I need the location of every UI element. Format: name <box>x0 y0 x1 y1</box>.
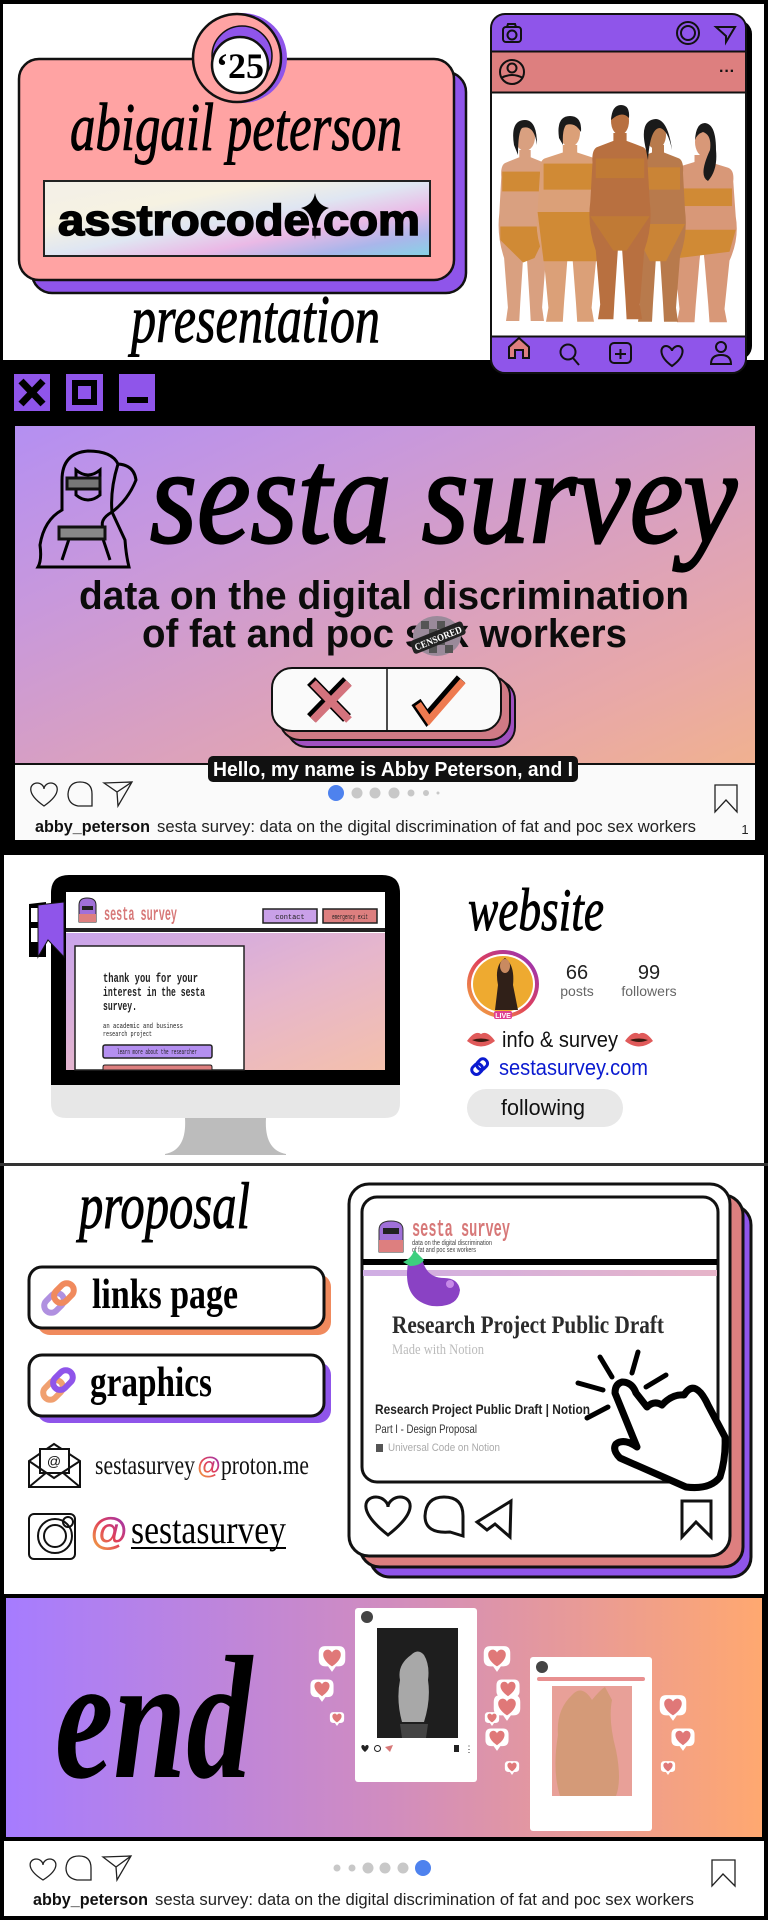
instagram row: @ <box>90 1511 128 1553</box>
heading: website: website <box>468 877 604 943</box>
email row: @ <box>47 1453 61 1469</box>
stat: followers: 99 <box>638 962 660 984</box>
pagination dots <box>334 1860 431 1876</box>
pagination dots <box>328 785 440 801</box>
site header logo <box>79 898 96 922</box>
icon: profile badge and send <box>677 22 735 44</box>
panel: post footer 1 <box>15 756 755 840</box>
notion sub title: of fat and poc sex workers <box>412 1247 476 1254</box>
post caption: sesta survey: data on the digital discrimination of fat and poc sex workers <box>155 1890 694 1909</box>
icon: home <box>509 338 529 358</box>
stat: followers: followers <box>621 983 677 999</box>
profile avatar: LIVE <box>495 1013 511 1020</box>
icon: user <box>500 60 524 84</box>
badge: '25 <box>193 13 287 103</box>
panel: website section <box>0 855 768 1166</box>
bottom nav icons <box>560 342 731 366</box>
icon: cross <box>311 681 349 720</box>
emergency exit button <box>323 909 377 923</box>
link preview: Part I - Design Proposal <box>375 1422 477 1436</box>
post action icons <box>30 1856 735 1886</box>
site content card: survey. <box>103 999 137 1014</box>
notion sub title: data on the digital discrimination <box>412 1240 492 1247</box>
post card with dark photo: ⋮ <box>464 1744 474 1754</box>
heading: proposal: proposal <box>76 1170 250 1243</box>
censored stamp: CENSORED <box>413 625 464 653</box>
phone mockup <box>491 14 752 373</box>
post caption: abby_peterson <box>33 1890 148 1909</box>
site content card: an academic and business <box>103 1023 183 1031</box>
panel: sesta survey slide <box>15 422 755 763</box>
stat: posts <box>560 962 594 999</box>
notion post card <box>349 1184 751 1577</box>
emergency exit button: emergency exit <box>332 914 368 922</box>
bookmark ribbon <box>29 902 64 957</box>
panel: title section background <box>3 4 764 360</box>
instagram row: sestasurvey <box>131 1507 286 1552</box>
post card with dark photo <box>355 1608 477 1782</box>
email row: proton.me <box>221 1450 309 1480</box>
link preview: Universal Code on Notion <box>388 1442 500 1454</box>
monitor <box>29 875 400 1155</box>
contact button: contact <box>275 914 305 922</box>
icon: chain link purple <box>40 1367 76 1403</box>
window buttons <box>14 374 155 411</box>
notion page heading: Research Project Public Draft <box>392 1312 665 1339</box>
post caption: sesta survey: data on the digital discrimination of fat and poc sex workers <box>157 817 696 836</box>
link preview <box>375 1401 590 1454</box>
email row <box>29 1444 309 1487</box>
badge: '25: ‘25 <box>216 46 264 86</box>
presentation label: presentation <box>128 281 380 357</box>
stat: followers <box>621 962 677 999</box>
button: graphics: graphics <box>90 1360 212 1406</box>
panel: proposal section <box>4 1166 764 1594</box>
stat: posts: posts <box>560 983 594 999</box>
notion byline: Made with Notion <box>392 1342 484 1358</box>
post caption: abby_peterson <box>35 817 150 836</box>
site content card: learn more about the researcher <box>117 1049 197 1057</box>
notion logo <box>379 1221 403 1252</box>
post card with pink photo <box>530 1657 652 1831</box>
button: links page: links page <box>92 1272 238 1318</box>
icon: camera <box>503 24 521 42</box>
post action icons <box>31 782 737 812</box>
site title: sesta survey <box>104 904 177 926</box>
card action icons <box>366 1497 711 1537</box>
bio line <box>467 1027 653 1052</box>
panel: post footer 2 <box>4 1841 764 1916</box>
contact button <box>263 909 317 923</box>
site content card <box>75 946 244 1070</box>
button: links page <box>29 1267 331 1335</box>
icon: censored figure logo <box>38 451 136 567</box>
illustration: five women <box>499 105 737 322</box>
icon: menu dots: ··· <box>719 63 735 80</box>
url box <box>44 181 430 256</box>
icon: tapping hand <box>578 1352 725 1488</box>
panel: end section <box>6 1598 762 1837</box>
site content card: interest in the sesta <box>103 985 205 1000</box>
icon: check <box>416 679 463 720</box>
notion title: sesta survey <box>412 1217 510 1244</box>
instagram row <box>29 1507 286 1559</box>
bio line: info & survey <box>502 1027 618 1052</box>
link preview: Research Project Public Draft | Notion <box>375 1401 590 1417</box>
stat: posts: 66 <box>566 962 588 984</box>
email row: @ <box>197 1453 221 1480</box>
heart notifications <box>310 1646 695 1775</box>
button: graphics <box>29 1355 331 1423</box>
url box: asstrocode.com <box>58 196 420 245</box>
site content card: research project <box>103 1031 152 1039</box>
icon: chain link orange <box>41 1280 77 1316</box>
slide number: 1 <box>741 822 749 837</box>
subheading line 2: of fat and poc sex workers <box>142 612 627 656</box>
site content card: thank you for your <box>103 971 198 986</box>
name heading: abigail peterson <box>70 89 402 165</box>
subheading: data on the digital discrimination <box>79 574 689 618</box>
title card <box>19 13 466 293</box>
heading: end: end <box>55 1621 254 1816</box>
subtitle caption: Hello, my name is Abby Peterson, and I <box>213 759 573 781</box>
following button <box>467 1089 623 1127</box>
profile avatar <box>467 950 539 1020</box>
website link: sestasurvey.com <box>499 1055 648 1080</box>
icon: eggplant <box>403 1250 460 1306</box>
censored stamp <box>409 616 467 656</box>
following button: following <box>501 1095 585 1120</box>
email row: sestasurvey <box>95 1450 195 1480</box>
yes and no buttons <box>272 668 515 747</box>
